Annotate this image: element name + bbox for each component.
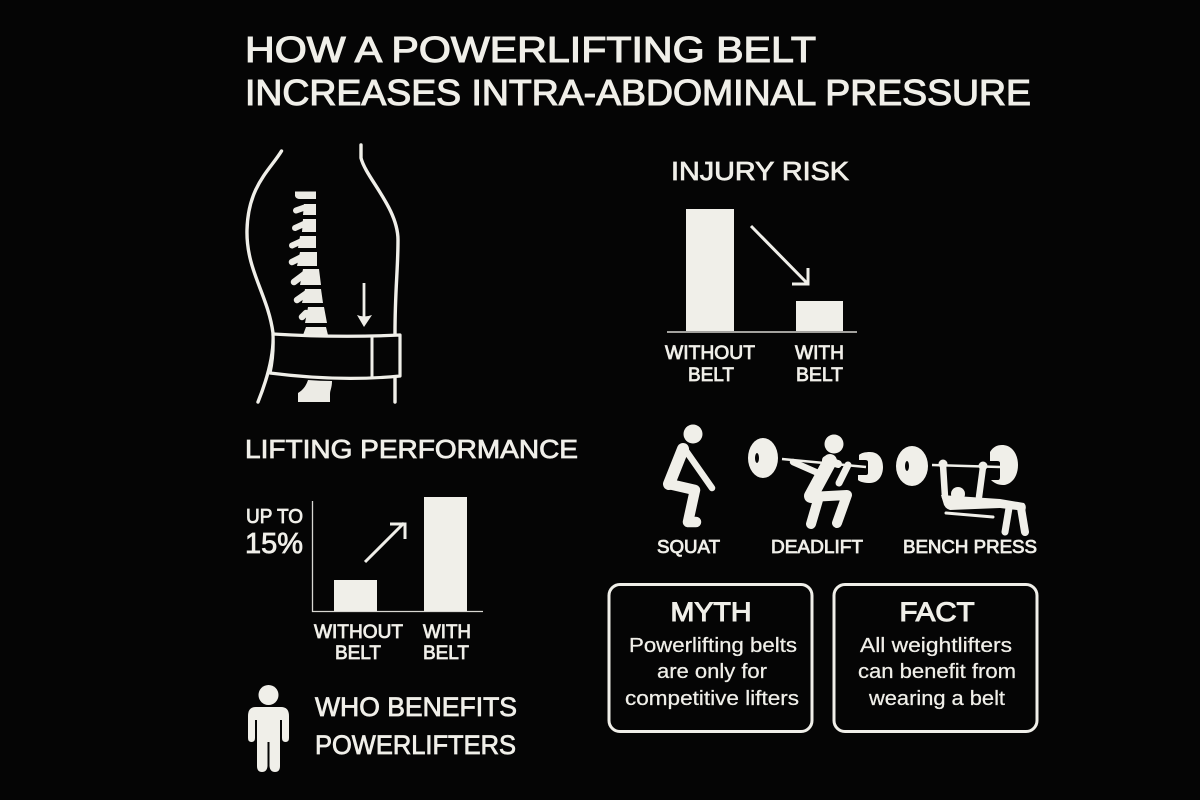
callout: up to 15%: UP TO bbox=[246, 506, 303, 528]
bar: without belt bbox=[334, 580, 377, 611]
bar chart: lifting performance bbox=[312, 497, 483, 664]
label: with belt: WITH bbox=[795, 343, 844, 364]
text: who benefits powerlifters bbox=[315, 692, 517, 760]
label: without belt: BELT bbox=[335, 643, 381, 664]
label: bench press: BENCH PRESS bbox=[903, 537, 1037, 557]
heading: myth: MYTH bbox=[670, 597, 752, 627]
heading: lifting performance: LIFTING PERFORMANCE bbox=[245, 434, 578, 464]
title: INCREASES INTRA-ABDOMINAL PRESSURE bbox=[245, 72, 1031, 113]
torso diagram with spine and belt bbox=[247, 145, 400, 402]
label: without belt: WITHOUT bbox=[314, 622, 403, 643]
label: without belt: WITHOUT bbox=[665, 343, 755, 364]
text: myth body: are only for bbox=[657, 661, 767, 683]
label: with belt: BELT bbox=[796, 365, 843, 386]
label: with belt: BELT bbox=[423, 643, 469, 664]
label: without belt: BELT bbox=[688, 365, 734, 386]
arrow: decrease bbox=[751, 226, 808, 284]
icon: bench press bbox=[896, 445, 1026, 532]
body outline bbox=[247, 145, 398, 402]
text: who benefits powerlifters: POWERLIFTERS bbox=[315, 730, 516, 760]
bar: with belt bbox=[796, 301, 843, 331]
text: myth body: Powerlifting belts bbox=[629, 635, 797, 657]
panel: fact bbox=[834, 584, 1037, 732]
text: fact body bbox=[858, 635, 1016, 710]
callout: up to 15% bbox=[245, 506, 303, 560]
bar: without belt bbox=[686, 209, 734, 331]
icon: deadlift bbox=[748, 434, 883, 524]
title: HOW A POWERLIFTING BELT bbox=[245, 29, 816, 70]
callout: up to 15%: 15% bbox=[245, 528, 303, 560]
heading: fact: FACT bbox=[900, 597, 974, 627]
bar: with belt bbox=[424, 497, 467, 611]
panel: myth bbox=[609, 584, 812, 732]
icon: squat bbox=[669, 424, 712, 522]
label: with belt: WITH bbox=[423, 622, 471, 643]
text: myth body bbox=[625, 635, 799, 710]
label: with belt bbox=[795, 343, 844, 386]
exercise: deadlift bbox=[748, 434, 883, 557]
arrow: increase bbox=[365, 523, 405, 562]
text: fact body: All weightlifters bbox=[860, 635, 1012, 657]
label: squat: SQUAT bbox=[657, 537, 720, 557]
arrow: downward pressure bbox=[357, 283, 372, 327]
spine bbox=[292, 192, 328, 335]
exercise: bench press bbox=[896, 445, 1037, 557]
heading: injury risk: INJURY RISK bbox=[671, 156, 850, 186]
text: who benefits powerlifters: WHO BENEFITS bbox=[315, 692, 517, 722]
exercise: squat bbox=[657, 424, 720, 557]
pelvis and tailbone bbox=[298, 380, 332, 402]
label: without belt bbox=[314, 622, 403, 664]
label: with belt bbox=[423, 622, 471, 664]
title bbox=[245, 29, 1031, 113]
text: fact body: can benefit from bbox=[858, 661, 1016, 683]
icon: person bbox=[248, 685, 289, 772]
label: deadlift: DEADLIFT bbox=[771, 537, 863, 557]
text: fact body: wearing a belt bbox=[868, 688, 1005, 710]
text: myth body: competitive lifters bbox=[625, 688, 799, 710]
label: without belt bbox=[665, 343, 755, 386]
bar chart: injury risk bbox=[665, 209, 857, 386]
belt bbox=[270, 334, 400, 378]
